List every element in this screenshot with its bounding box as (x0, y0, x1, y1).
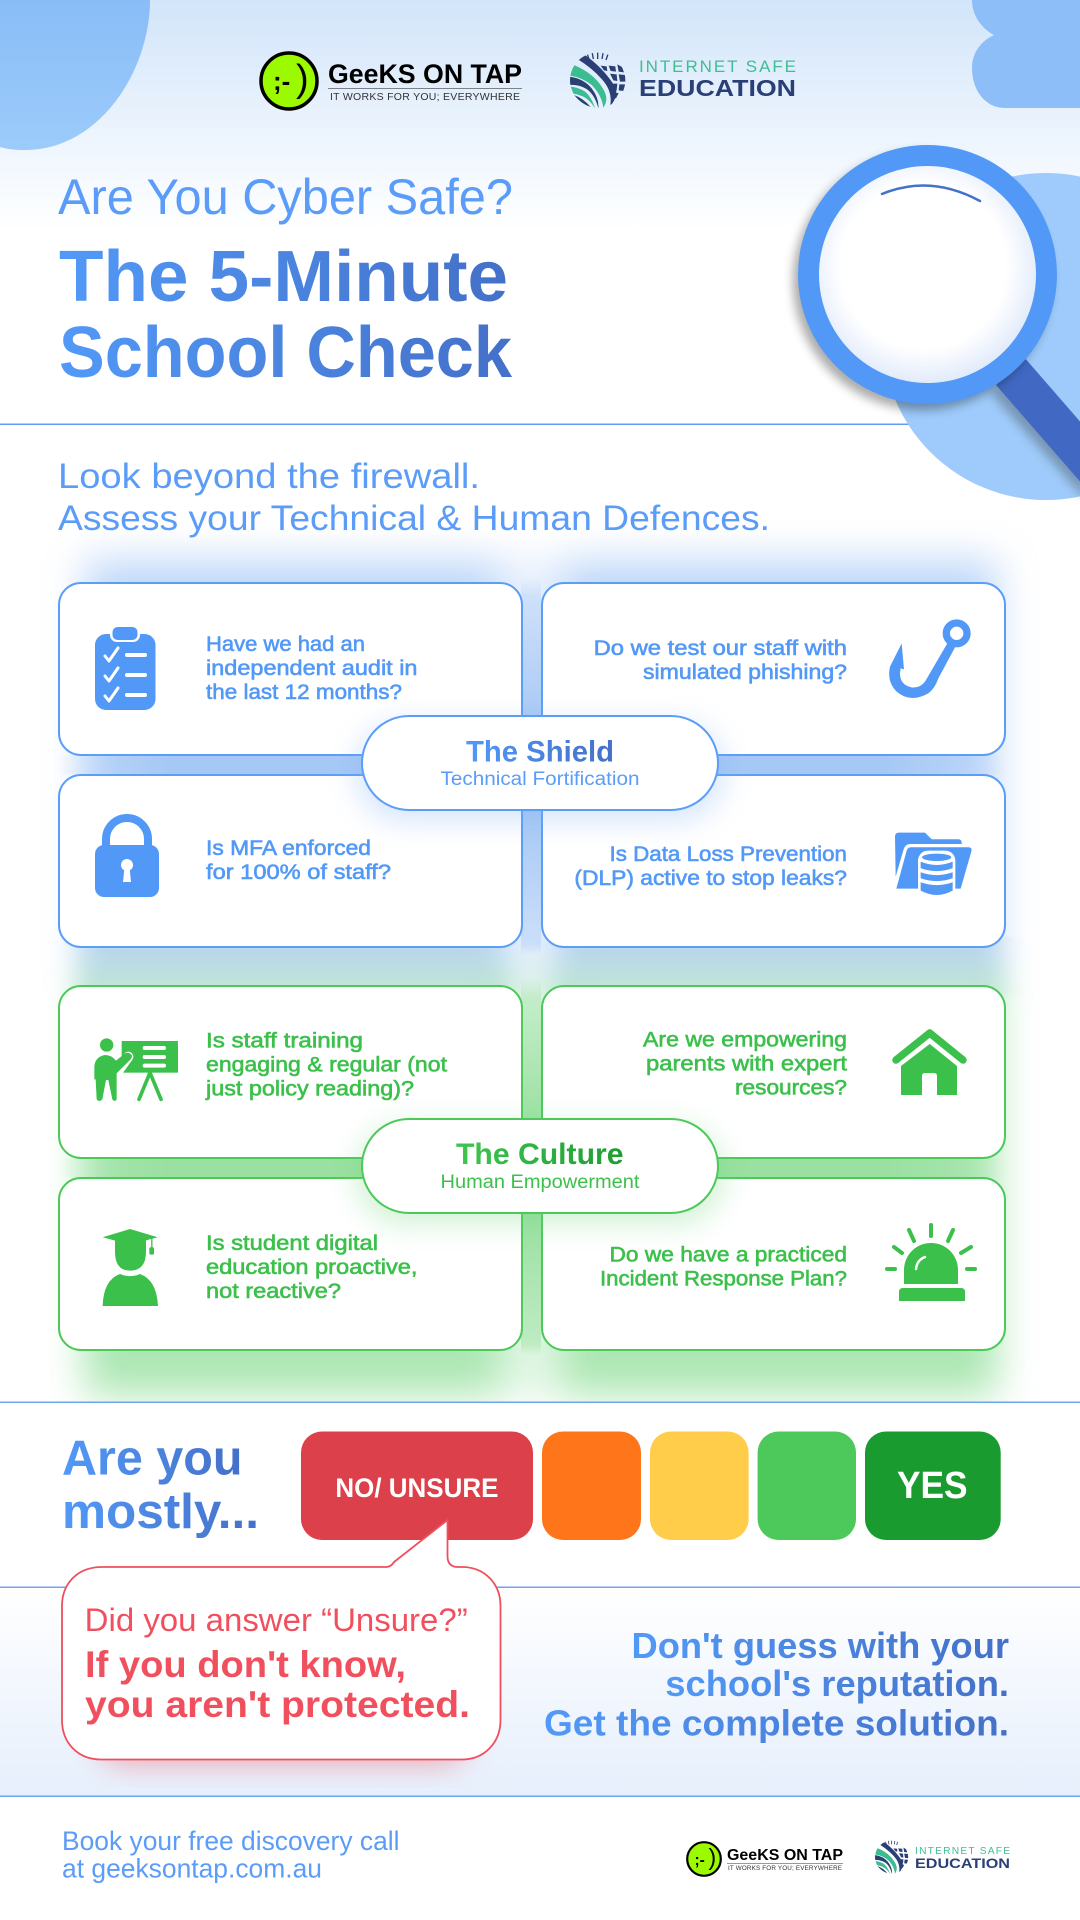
pill: The Shield label: The Shield (466, 736, 614, 769)
title (59, 237, 513, 393)
card: staff training: Is staff training (206, 1030, 363, 1053)
footer: contact text: at geeksontap.com.au (62, 1854, 322, 1884)
footer logo: Geeks On Tap: ) (708, 1844, 716, 1870)
card: staff training: just policy reading)? (205, 1078, 414, 1101)
card: incident response: Incident Response Plan? (600, 1268, 847, 1291)
card: student education (59, 1178, 522, 1350)
footer: contact text: Book your free discovery call (62, 1826, 400, 1856)
heading: Are you mostly: mostly... (62, 1485, 259, 1539)
call to action text: Don't guess with your (632, 1625, 1009, 1666)
divider: header (0, 424, 960, 425)
card: audit: Have we had an (206, 633, 365, 656)
footer logo: Geeks On Tap: ;- (694, 1852, 705, 1869)
icon: database folder (895, 833, 972, 897)
icon: graduate (103, 1229, 158, 1306)
card: phishing: simulated phishing? (643, 661, 847, 684)
icon: teacher at board (94, 1038, 178, 1101)
title: The 5-Minute (59, 237, 508, 317)
divider: scale bottom (0, 1586, 1080, 1588)
logo: Internet Safe Education: EDUCATION (639, 75, 796, 101)
title: School Check (59, 313, 513, 393)
panel glow: green (85, 975, 997, 1395)
icon: house (896, 1033, 963, 1095)
icon: fish hook (889, 623, 967, 698)
logo: Geeks On Tap: GeeKS ON TAP (328, 59, 522, 89)
callout: If you don't know, (85, 1644, 406, 1685)
footer: contact text (62, 1826, 400, 1884)
scale: yes: YES (897, 1465, 968, 1507)
pill shadow (355, 1125, 725, 1225)
subtitle: Assess your Technical & Human Defences. (58, 499, 770, 538)
card: DLP: (DLP) active to stop leaks? (574, 867, 847, 890)
pill: The Culture label (362, 1119, 718, 1213)
icon: padlock (95, 818, 159, 897)
card: parents: parents with expert (646, 1053, 847, 1076)
icon: magnifying glass (793, 145, 1080, 500)
logo: Geeks On Tap: ) (296, 58, 309, 100)
card: MFA: for 100% of staff? (206, 861, 391, 884)
card: audit (59, 583, 522, 755)
decorative blob: top left (0, 0, 150, 150)
card: student education: not reactive? (206, 1280, 341, 1303)
callout: Did you answer “Unsure?” (85, 1602, 468, 1638)
decorative blob: behind magnifier (882, 173, 1080, 500)
scale: green (758, 1432, 856, 1540)
footer logo: Internet Safe Education (875, 1840, 1010, 1874)
pill: The Shield label: Technical Fortification (440, 769, 640, 790)
call to action text: Get the complete solution. (544, 1703, 1009, 1744)
card: phishing (542, 583, 1005, 755)
card: student education: Is student digital (206, 1232, 378, 1255)
scale: no or unsure (301, 1432, 533, 1540)
scale: yellow (650, 1432, 749, 1540)
decorative blob: top right (972, 0, 1080, 108)
card: student education: education proactive, (206, 1256, 418, 1279)
pill: The Culture label: The Culture (456, 1138, 624, 1171)
card: incident response (542, 1178, 1005, 1350)
card: incident response: Do we have a practiced (610, 1244, 847, 1267)
divider: footer (0, 1796, 1080, 1797)
footer logo: Geeks On Tap (687, 1842, 843, 1876)
card: MFA (59, 775, 522, 947)
card: parents: resources? (735, 1077, 847, 1100)
card: audit: independent audit in (206, 657, 418, 680)
logo: Geeks On Tap: IT WORKS FOR YOU; EVERYWHERE (330, 91, 520, 103)
heading: Are you mostly (62, 1432, 259, 1539)
divider: scale top (0, 1402, 1080, 1403)
card: DLP (542, 775, 1005, 947)
logo: Geeks On Tap (261, 53, 522, 109)
panel: The Culture (58, 978, 1005, 1355)
scale: yes (865, 1432, 1001, 1540)
rating scale (301, 1432, 1001, 1540)
footer logo: Internet Safe Education: EDUCATION (915, 1855, 1010, 1871)
logo: Geeks On Tap: ;- (273, 66, 290, 96)
card: staff training (59, 986, 522, 1158)
panel glow: blue (85, 560, 997, 985)
card: phishing: Do we test our staff with (594, 637, 847, 660)
card: parents (542, 986, 1005, 1158)
panel: The Shield (58, 578, 1005, 955)
scale: orange (542, 1432, 641, 1540)
card: parents: Are we empowering (643, 1029, 847, 1052)
icon: alarm siren (887, 1225, 975, 1301)
heading: Are you mostly: Are you (62, 1432, 242, 1486)
callout shadow (95, 1690, 470, 1765)
pill shadow (355, 722, 725, 822)
subtitle (58, 457, 770, 538)
section background cover below scale (0, 1403, 1080, 1587)
card: staff training: engaging & regular (not (206, 1054, 447, 1077)
glow band between panels (88, 937, 993, 995)
subtitle: Look beyond the firewall. (58, 457, 480, 496)
card: audit: the last 12 months? (206, 681, 402, 704)
call to action text (544, 1625, 1009, 1744)
call to action text: school's reputation. (665, 1663, 1009, 1704)
footer logo: Internet Safe Education: INTERNET SAFE (915, 1846, 1010, 1857)
logo: Internet Safe Education: INTERNET SAFE (639, 57, 796, 76)
scale: no or unsure: NO/ UNSURE (335, 1473, 498, 1503)
callout: you aren't protected. (85, 1684, 470, 1725)
callout (62, 1520, 500, 1760)
icon: clipboard checklist (95, 625, 156, 710)
pill: The Culture label: Human Empowerment (440, 1172, 640, 1193)
footer logo: Geeks On Tap: IT WORKS FOR YOU; EVERYWHERE (728, 1865, 842, 1872)
pill: The Shield label (362, 716, 718, 810)
card: MFA: Is MFA enforced (206, 837, 371, 860)
card: DLP: Is Data Loss Prevention (610, 843, 847, 866)
logo: Internet Safe Education (569, 52, 796, 108)
footer logo: Geeks On Tap: GeeKS ON TAP (727, 1847, 843, 1864)
heading: Are You Cyber Safe: Are You Cyber Safe? (58, 169, 513, 225)
